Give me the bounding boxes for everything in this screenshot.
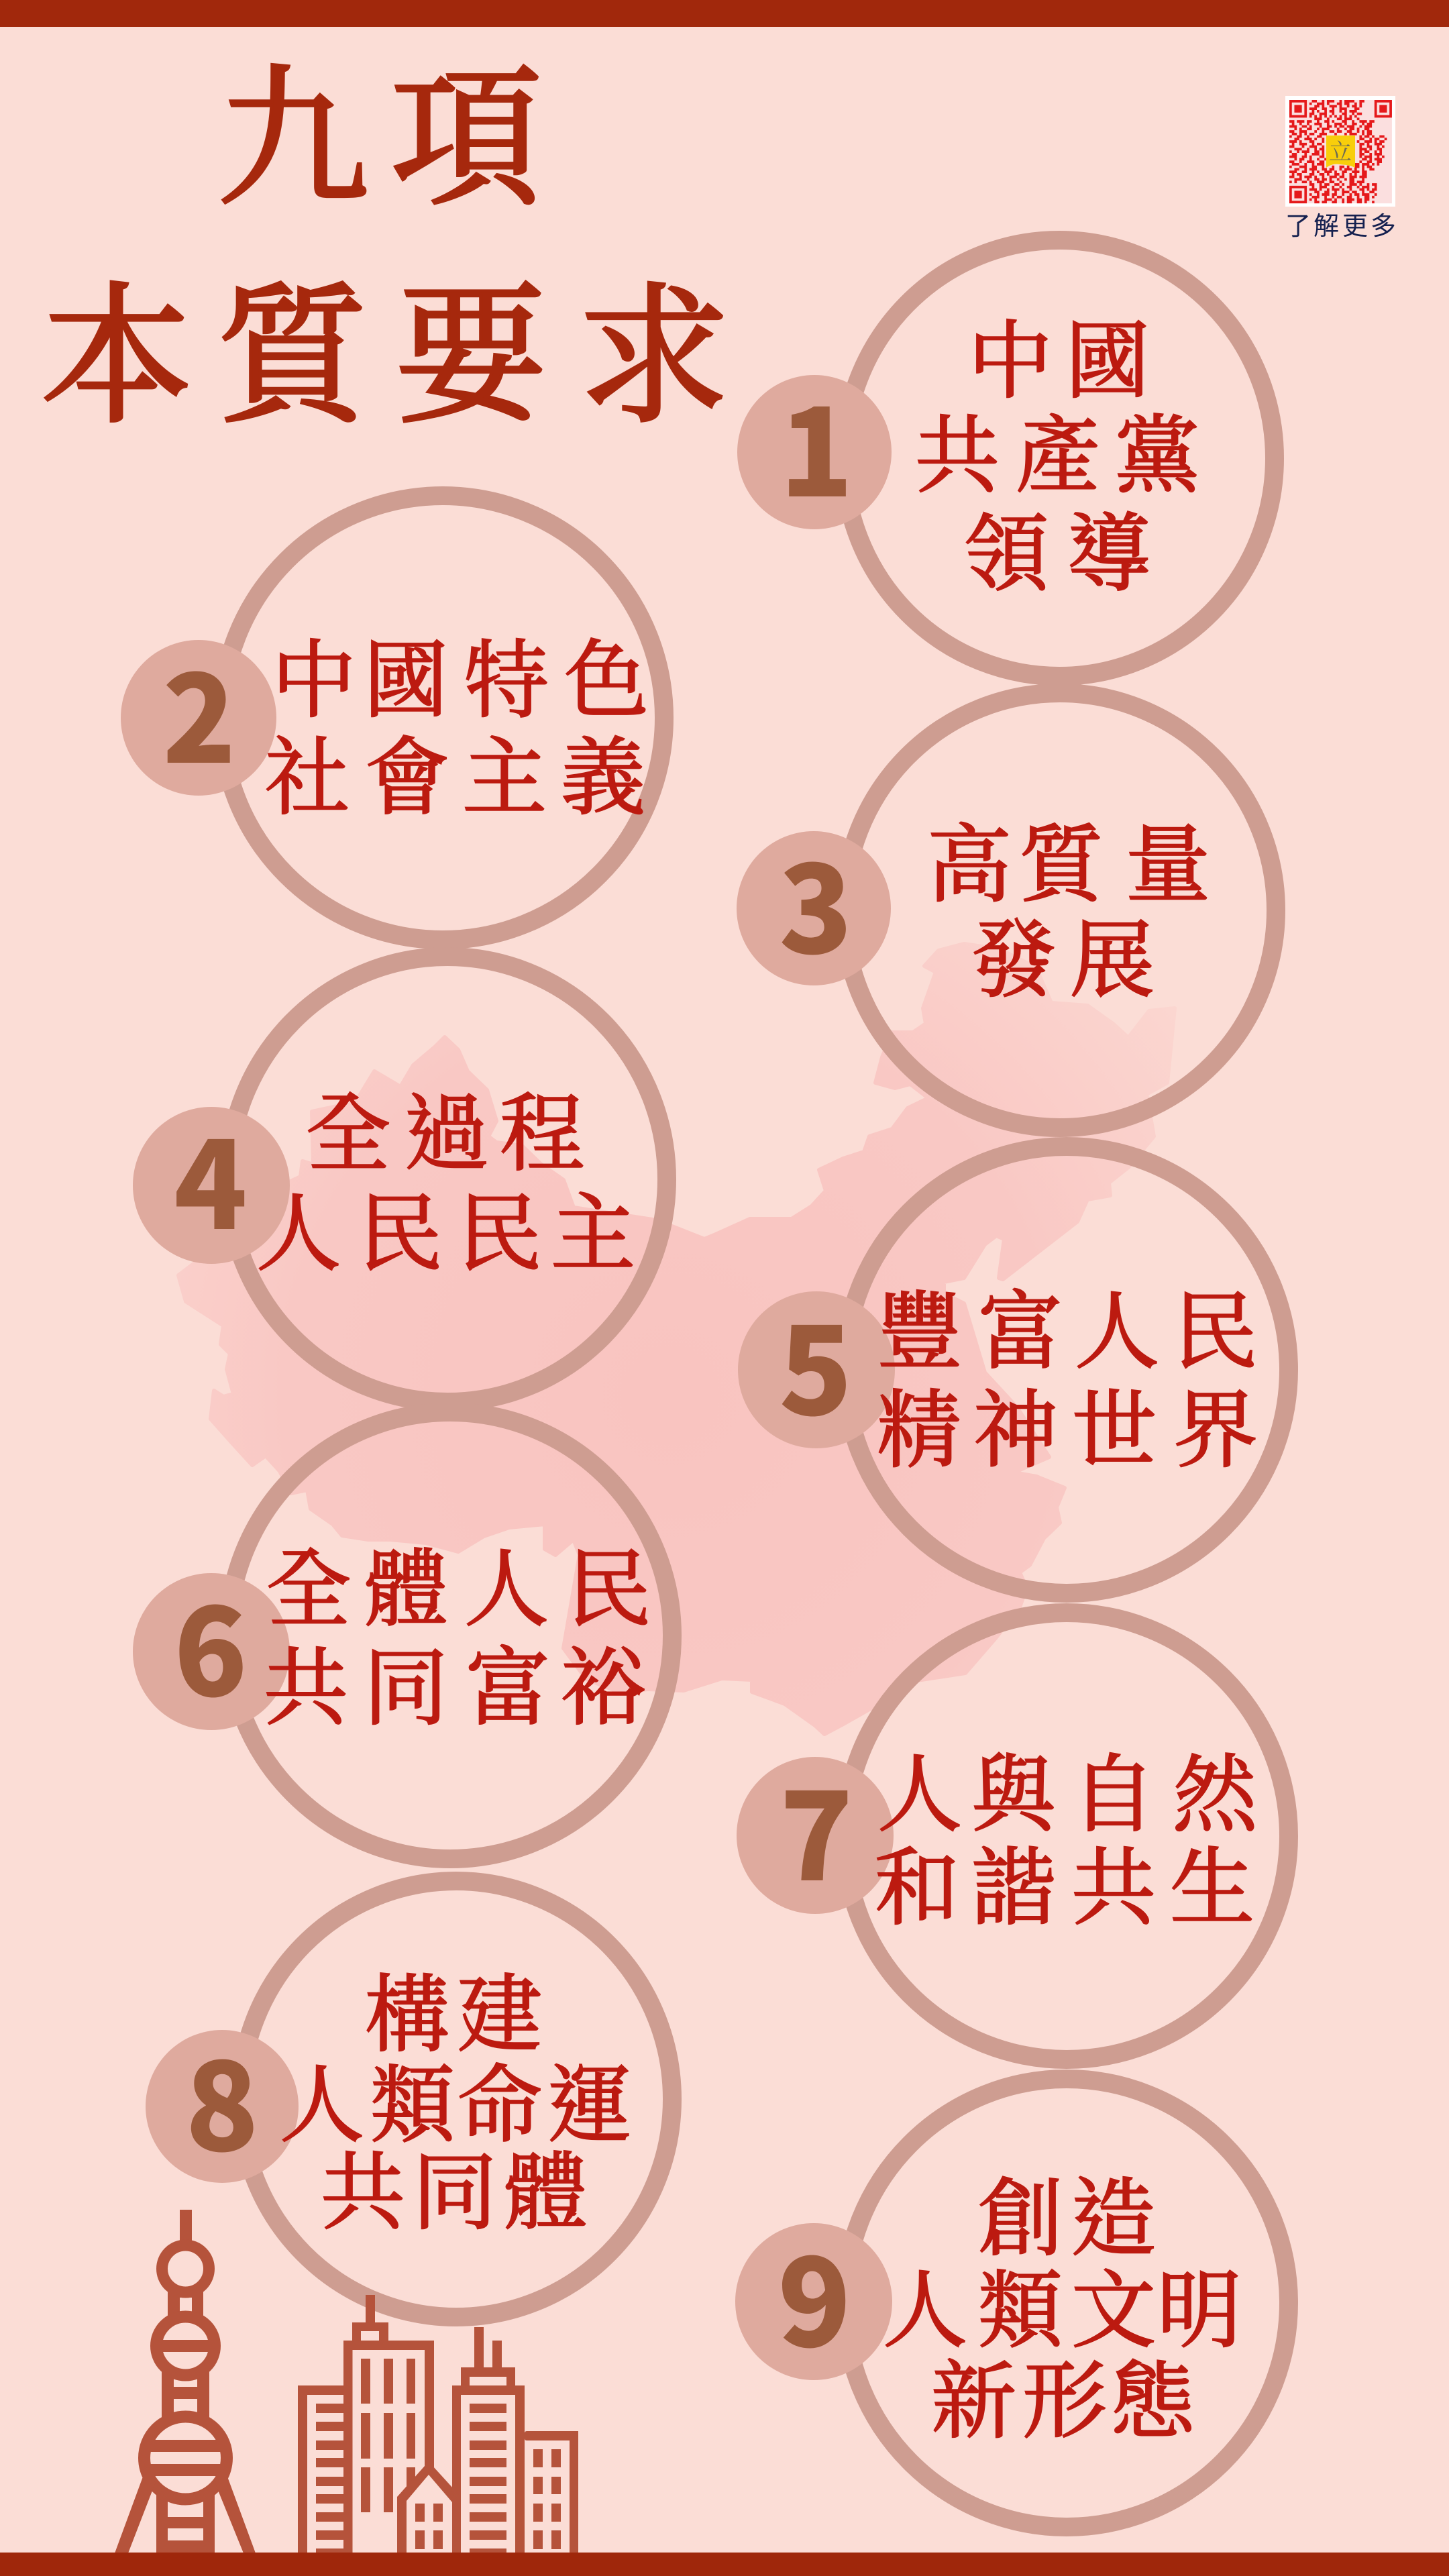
badge 6	[133, 1556, 290, 1731]
badge 8: 8	[185, 2010, 259, 2186]
badge 1: 1	[780, 356, 853, 531]
badge 4	[133, 1089, 290, 1264]
top bar	[0, 0, 1449, 27]
small house	[397, 2466, 461, 2553]
panel 7	[737, 1613, 1289, 2059]
icon: Oriental Pearl tower	[115, 2210, 256, 2553]
badge 9: 9	[777, 2206, 851, 2381]
badge 6: 6	[174, 1556, 248, 1731]
panel 6: 共同富裕	[264, 1643, 645, 1736]
panel 3	[737, 693, 1276, 1128]
panel 8	[146, 1881, 672, 2317]
badge 5	[738, 1275, 895, 1450]
badge 2: 2	[162, 623, 236, 798]
text 8: 構建	[365, 1970, 542, 2063]
panel 3: 發展	[971, 915, 1155, 1008]
panel 4	[133, 957, 667, 1402]
title: 九項	[217, 56, 542, 224]
badge 7	[737, 1740, 894, 1915]
icon: city skyline	[298, 2295, 578, 2553]
bottom bar	[0, 2553, 1449, 2576]
QR code block	[1285, 96, 1396, 241]
badge 5: 5	[779, 1275, 853, 1450]
panel 9: 人類文明	[883, 2265, 1242, 2359]
text 1: 中國	[968, 316, 1150, 409]
text 5: 豐富人民	[877, 1287, 1258, 1380]
panel 5	[738, 1146, 1289, 1593]
badge 9	[735, 2206, 892, 2381]
text 2: 中國特色	[272, 635, 649, 729]
panel 8: 共同體	[321, 2147, 588, 2241]
text 6: 全體人民	[266, 1544, 651, 1638]
QR code	[1285, 96, 1395, 207]
text 4: 全過程	[306, 1089, 584, 1182]
title: 本質要求	[41, 274, 730, 442]
badge 8	[146, 2010, 299, 2186]
panel 9	[735, 2079, 1289, 2527]
badge 2	[121, 623, 276, 798]
panel 1: 領導	[964, 509, 1151, 602]
badge 3	[737, 813, 891, 988]
text 3: 高質量	[927, 820, 1210, 913]
panel 6	[133, 1412, 672, 1859]
right tower	[452, 2327, 525, 2553]
badge 3: 3	[779, 813, 853, 988]
QR code: 立	[1329, 140, 1352, 165]
badge 1	[737, 356, 892, 531]
panel 2	[121, 496, 664, 940]
panel 2: 社會主義	[265, 733, 645, 826]
badge 7: 7	[780, 1740, 853, 1915]
QR caption: 了解更多	[1285, 213, 1396, 241]
text 9: 創造	[978, 2174, 1156, 2267]
main tower	[343, 2295, 434, 2553]
badge 4: 4	[174, 1089, 248, 1264]
text 7: 人與自然	[877, 1750, 1260, 1843]
low building	[525, 2431, 578, 2553]
panel 7: 和諧共生	[875, 1843, 1254, 1936]
panel 1	[737, 240, 1275, 676]
panel 4: 人民民主	[256, 1189, 635, 1282]
panel 8: 人類命運	[280, 2060, 632, 2153]
map of China watermark	[178, 944, 1175, 1734]
left building	[298, 2385, 345, 2553]
panel 1: 共產黨	[915, 411, 1199, 504]
title	[41, 56, 730, 442]
panel 9: 新形態	[932, 2356, 1196, 2449]
panel 5: 精神世界	[877, 1385, 1258, 1479]
